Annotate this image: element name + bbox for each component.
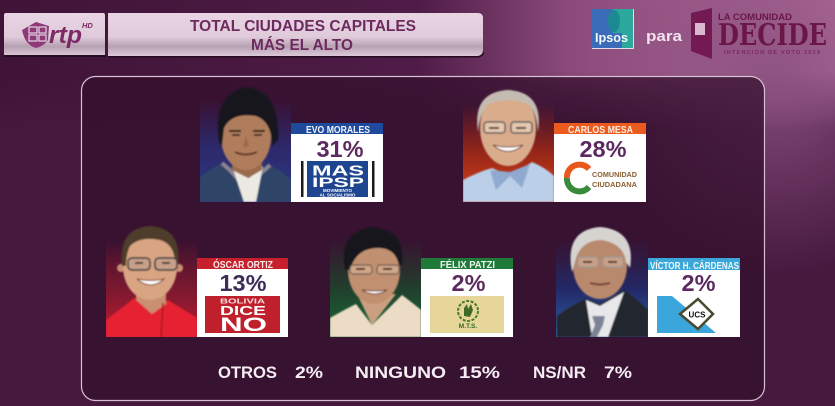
La Comunidad Decide logo: LA COMUNIDAD bbox=[718, 12, 793, 22]
party logo: Comunidad Ciudadana: CIUDADANA bbox=[592, 180, 638, 189]
party logo: UCS bbox=[657, 296, 716, 333]
portrait: Víctor H. Cárdenas bbox=[556, 227, 648, 337]
party logo: MTS bbox=[430, 296, 504, 333]
HD mark: HD bbox=[82, 21, 93, 30]
party logo: MAS IPSP: IPSP bbox=[312, 174, 364, 190]
party logo: MAS IPSP: MOVIMIENTO bbox=[323, 188, 352, 193]
party logo: Comunidad Ciudadana bbox=[567, 165, 638, 191]
party logo: Bolivia Dice No: DICE bbox=[220, 304, 266, 318]
party logo: MAS IPSP bbox=[301, 161, 374, 198]
other results row bbox=[218, 363, 632, 382]
name: VÍCTOR H. CÁRDENAS bbox=[650, 259, 739, 272]
NS/NR: 7% bbox=[604, 363, 632, 382]
name: EVO MORALES bbox=[306, 124, 370, 136]
para label: para bbox=[646, 28, 683, 45]
candidate: Félix Patzi bbox=[330, 227, 513, 337]
party logo: MAS IPSP: MAS bbox=[312, 162, 364, 180]
percentage: 2% bbox=[452, 270, 486, 296]
portrait: Evo Morales bbox=[200, 87, 291, 202]
background bbox=[0, 0, 835, 250]
name: FÉLIX PATZI bbox=[440, 258, 495, 271]
Ninguno: NINGUNO bbox=[355, 363, 446, 382]
title bar: MÁS EL ALTO bbox=[251, 37, 353, 54]
rtp wordmark: rtp bbox=[49, 22, 82, 49]
Ninguno: 15% bbox=[459, 363, 500, 382]
card bbox=[291, 123, 383, 202]
percentage: 13% bbox=[219, 270, 267, 296]
Ipsos logo bbox=[592, 9, 634, 49]
Ipsos logo: Ipsos bbox=[595, 31, 628, 45]
party logo: Bolivia Dice No: BOLIVIA bbox=[220, 298, 265, 306]
rtp logo bar bbox=[4, 13, 106, 57]
NS/NR bbox=[533, 363, 632, 382]
party logo: MAS IPSP: AL SOCIALISMO bbox=[320, 192, 356, 198]
party logo: Comunidad Ciudadana: COMUNIDAD bbox=[592, 170, 638, 179]
Otros bbox=[218, 363, 323, 382]
Otros: 2% bbox=[295, 363, 323, 382]
icon: rtp shield bbox=[22, 22, 49, 48]
percentage: 28% bbox=[579, 136, 627, 162]
NS/NR: NS/NR bbox=[533, 363, 586, 382]
candidate: Carlos Mesa bbox=[463, 90, 646, 202]
portrait: Carlos Mesa bbox=[463, 90, 554, 202]
candidate: Óscar Ortiz bbox=[106, 226, 288, 337]
party logo: MTS: M.T.S. bbox=[459, 323, 477, 330]
title bar bbox=[108, 13, 484, 58]
La Comunidad Decide logo bbox=[691, 8, 827, 59]
title text: TOTAL CIUDADES CAPITALES bbox=[190, 18, 416, 35]
name: ÓSCAR ORTIZ bbox=[213, 258, 273, 271]
candidate: Víctor H. Cárdenas bbox=[556, 227, 740, 337]
card bbox=[554, 123, 646, 202]
main panel outline bbox=[82, 76, 764, 400]
party logo: Bolivia Dice No: NO bbox=[220, 314, 267, 336]
party logo: Bolivia Dice No bbox=[205, 296, 280, 336]
party logo: UCS: UCS bbox=[689, 310, 706, 320]
La Comunidad Decide logo: INTENCIÓN DE VOTO 2019 bbox=[724, 48, 820, 56]
candidate: Evo Morales bbox=[200, 87, 383, 202]
card bbox=[648, 258, 740, 337]
Otros: OTROS bbox=[218, 363, 277, 382]
percentage: 31% bbox=[316, 136, 364, 162]
percentage: 2% bbox=[682, 270, 716, 296]
portrait: Óscar Ortiz bbox=[106, 226, 197, 337]
card bbox=[197, 258, 288, 337]
name: CARLOS MESA bbox=[568, 124, 633, 136]
portrait: Félix Patzi bbox=[330, 227, 421, 337]
card bbox=[421, 258, 513, 337]
Ninguno bbox=[355, 363, 500, 382]
